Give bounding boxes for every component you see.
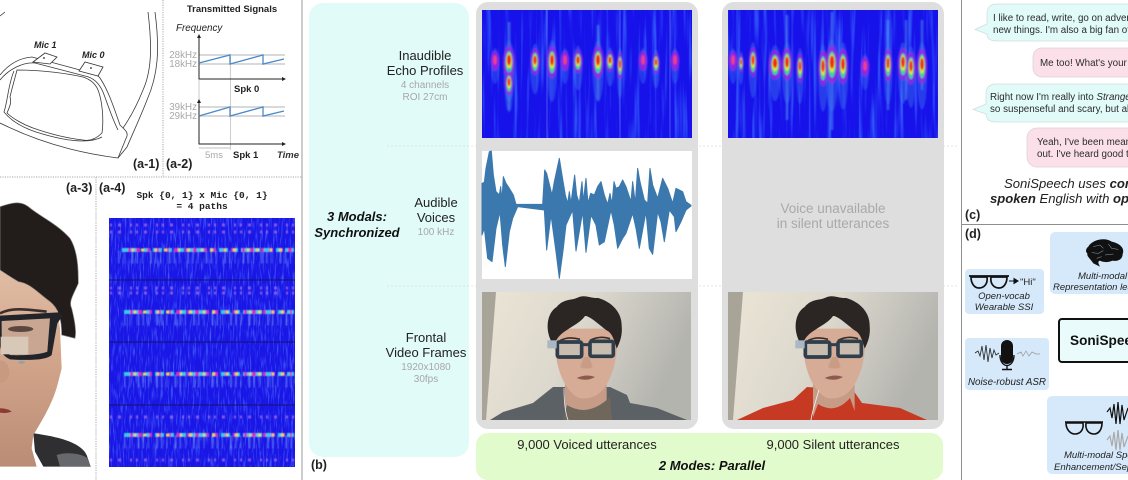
mic 0 label: Mic 0 xyxy=(82,50,105,60)
label: echo profiles: Echo Profiles xyxy=(387,63,464,78)
voice unavailable note: in silent utterances xyxy=(777,216,890,231)
label: audible voices xyxy=(414,195,458,238)
panel: (c) conversation sample xyxy=(965,4,1128,222)
label: video frames xyxy=(386,330,467,385)
time axis label: Time xyxy=(277,150,300,161)
label d: (d) xyxy=(965,227,981,241)
voiced video frame xyxy=(482,292,691,420)
label a-4: (a-4) xyxy=(99,181,125,195)
voiced echo spectrogram xyxy=(482,10,692,138)
speaker 0 label: Spk 0 xyxy=(234,84,259,95)
label a-3: (a-3) xyxy=(66,181,92,195)
5ms span arrow xyxy=(199,147,230,149)
panel: (a) hardware setup xyxy=(0,0,302,480)
voice unavailable note xyxy=(777,201,890,231)
label: echo profiles: 4 channels xyxy=(401,80,449,91)
label: echo profiles xyxy=(387,48,464,103)
panel: 3 modals background xyxy=(309,3,469,457)
representation text: Multi-modal xyxy=(1078,271,1128,282)
chat bubble 4: out. I've heard good t xyxy=(1037,149,1128,160)
label a-1: (a-1) xyxy=(133,157,159,171)
28kHz label: 28kHz xyxy=(169,50,197,61)
silent video frame xyxy=(728,292,938,420)
label a-2: (a-2) xyxy=(166,157,192,171)
voiced column container xyxy=(476,2,698,429)
icon: glasses to Hi: "Hi" xyxy=(1020,277,1036,288)
label: echo profiles: Inaudible xyxy=(399,48,451,63)
chat bubble 4 xyxy=(1027,128,1128,167)
speaker 1 signal xyxy=(199,107,284,116)
caption xyxy=(990,176,1128,206)
SSI text xyxy=(975,291,1034,313)
chat bubble 3 xyxy=(973,84,1128,122)
label: audible voices: Voices xyxy=(417,210,456,225)
label: audible voices: 100 kHz xyxy=(418,227,454,238)
SoniSpeech center box xyxy=(1059,319,1128,362)
label: video frames: 1920x1080 xyxy=(401,362,451,373)
box: noise-robust ASR xyxy=(965,338,1049,390)
icon: black waveform xyxy=(1107,402,1128,424)
enhancement text xyxy=(1054,450,1128,473)
chart title: Transmitted Signals xyxy=(187,4,277,15)
wearer close-up photo xyxy=(0,203,91,467)
icon: gray waveform xyxy=(1107,430,1128,450)
mono caption: paths: Spk {0, 1} x Mic {0, 1} xyxy=(136,190,268,201)
silent column container xyxy=(722,2,944,429)
5ms label: 5ms xyxy=(205,150,223,161)
representation text xyxy=(1053,271,1128,293)
glasses line drawing xyxy=(0,12,158,158)
label: video frames: 30fps xyxy=(414,374,438,385)
box: speech enhancement xyxy=(1047,396,1128,474)
SSI text: Wearable SSI xyxy=(975,302,1034,313)
39kHz label: 39kHz xyxy=(169,102,197,113)
four-path echo profile xyxy=(109,218,295,467)
mono caption: paths: = 4 paths xyxy=(176,201,228,212)
voice unavailable note: Voice unavailable xyxy=(780,201,886,216)
silent utterance count: 9,000 Silent utterances xyxy=(767,437,900,452)
modal heading: Synchronized xyxy=(314,225,401,240)
icon: microphone with waves xyxy=(975,340,1040,370)
voiced audio waveform xyxy=(482,151,692,279)
mic 1 module xyxy=(33,53,57,64)
chat bubble 3: so suspenseful and scary, but al xyxy=(990,104,1128,115)
chat bubble 1 xyxy=(975,4,1128,41)
frequency axis label: Frequency xyxy=(176,23,223,34)
SSI text: Open-vocab xyxy=(978,291,1030,302)
chat bubble 2: Me too! What's your xyxy=(1040,58,1128,69)
box: open-vocab SSI xyxy=(965,269,1044,314)
icon: glasses xyxy=(1065,422,1103,434)
18kHz label: 18kHz xyxy=(169,59,197,70)
speaker 1 label: Spk 1 xyxy=(233,150,259,161)
mono caption: paths xyxy=(136,190,268,212)
modes heading: 2 Modes: Parallel xyxy=(658,458,765,473)
chat bubble 2 xyxy=(1033,48,1128,77)
speaker 0 signal xyxy=(199,55,284,64)
label: video frames: Video Frames xyxy=(386,345,467,360)
panel: (b) dataset modalities xyxy=(309,2,958,480)
label b: (b) xyxy=(311,458,327,472)
panel: (d) applications xyxy=(965,227,1128,474)
label: echo profiles: ROI 27cm xyxy=(402,92,448,103)
panel: 2 modes xyxy=(476,433,943,480)
29kHz label: 29kHz xyxy=(169,111,197,122)
box: representation learning xyxy=(1050,232,1128,294)
ASR text: Noise-robust ASR xyxy=(968,377,1046,388)
label: audible voices: Audible xyxy=(414,195,458,210)
mic 1 label: Mic 1 xyxy=(34,40,57,50)
silent echo spectrogram xyxy=(728,10,938,138)
transmitted signals chart xyxy=(169,4,300,161)
icon: brain xyxy=(1086,239,1123,267)
voiced utterance count: 9,000 Voiced utterances xyxy=(517,437,657,452)
label: video frames: Frontal xyxy=(406,330,446,345)
chat bubble 1: new things. I'm also a big fan of xyxy=(993,25,1128,36)
modal heading xyxy=(314,209,401,240)
label c: (c) xyxy=(965,208,980,222)
mic 0 module xyxy=(79,62,103,76)
modal heading: 3 Modals: xyxy=(327,209,387,224)
